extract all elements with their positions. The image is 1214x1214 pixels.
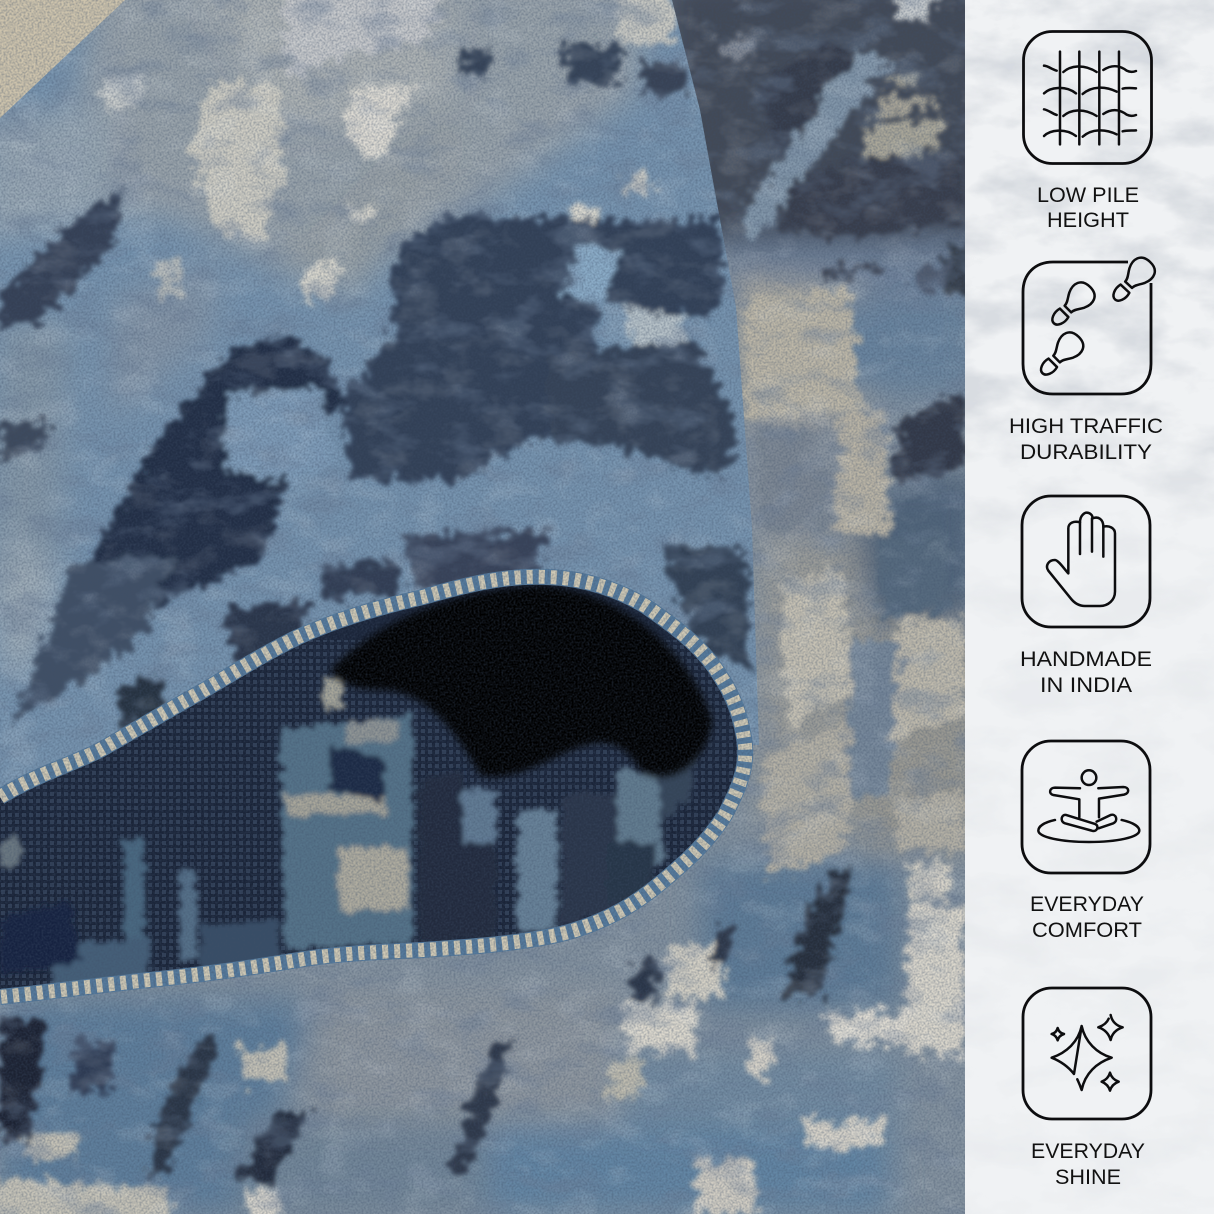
- mottling over rug top and floor: [0, 0, 965, 1214]
- feature: low pile height: [1024, 32, 1152, 232]
- icon: pile weave: [1024, 32, 1152, 164]
- label: [1009, 415, 1163, 464]
- label: [1030, 893, 1144, 942]
- label: LOW PILE: [1037, 184, 1139, 207]
- icon: hand: [1022, 496, 1150, 627]
- label: DURABILITY: [1020, 441, 1152, 464]
- label: [1037, 184, 1139, 232]
- feature: everyday comfort: [1022, 741, 1150, 942]
- label: [1031, 1140, 1145, 1189]
- rope seam: [0, 577, 745, 997]
- label: EVERYDAY: [1030, 893, 1144, 916]
- label: HIGH TRAFFIC: [1009, 415, 1163, 438]
- side panel background: [965, 0, 1214, 1214]
- label: SHINE: [1055, 1166, 1121, 1189]
- beige floor corner: [0, 0, 125, 118]
- label: IN INDIA: [1040, 674, 1132, 697]
- label: HANDMADE: [1020, 648, 1152, 671]
- black opening: [330, 585, 712, 777]
- icon: meditating figure: [1022, 741, 1150, 873]
- label: [1020, 648, 1152, 697]
- label: COMFORT: [1032, 919, 1142, 942]
- label: HEIGHT: [1047, 209, 1129, 232]
- pile texture: [0, 0, 965, 1214]
- feature: handmade in india: [1020, 496, 1152, 697]
- icon: footprints: [1023, 253, 1159, 394]
- label: EVERYDAY: [1031, 1140, 1145, 1163]
- feature: everyday shine: [1023, 988, 1151, 1189]
- roll underside: [0, 584, 738, 989]
- roll top face: [0, 0, 780, 800]
- icon: sparkles: [1023, 988, 1151, 1119]
- feature: high traffic durability: [1009, 253, 1163, 464]
